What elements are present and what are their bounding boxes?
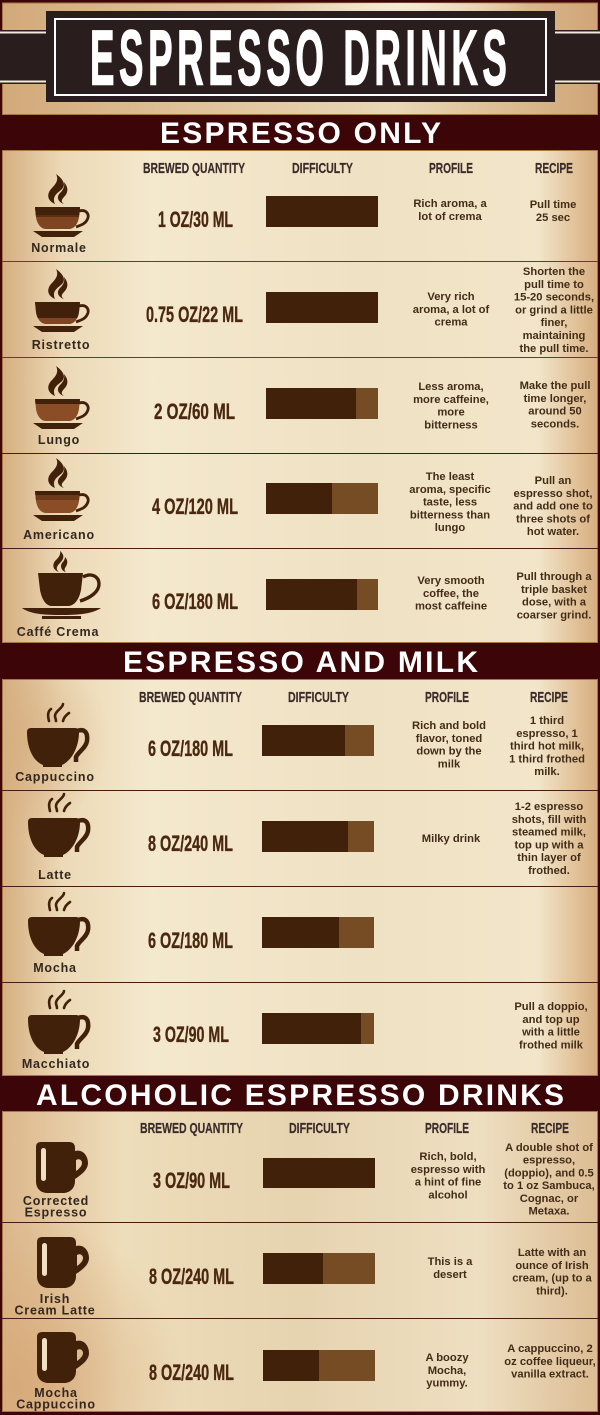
row: Ristretto: 0.75 OZ/22 ML — [146, 302, 243, 327]
row: Lungo: Make the pull — [520, 380, 590, 392]
row: Latte: Milky drink — [422, 833, 481, 845]
row: Ristretto: aroma, a lot of — [413, 304, 490, 316]
row: Corrected Espresso: Corrected — [23, 1194, 89, 1208]
section banner: espresso only — [0, 115, 600, 150]
row: Irish Cream Latte: Cream Latte — [14, 1304, 96, 1318]
row: Americano: aroma, specific — [409, 484, 491, 496]
row: Mocha Cappuccino: oz coffee liqueur, — [504, 1356, 596, 1368]
row: Latte: 8 OZ/240 ML — [148, 831, 233, 856]
column headers: DIFFICULTY — [292, 160, 353, 177]
column headers — [143, 160, 573, 177]
row: Ristretto: maintaining — [523, 330, 586, 342]
row: Macchiato: Pull a doppio, — [514, 1001, 588, 1013]
row: Mocha — [28, 893, 374, 975]
row: Ristretto — [32, 266, 594, 355]
icon: large cup and saucer — [22, 551, 101, 619]
row: Irish Cream Latte: Latte with an — [518, 1247, 586, 1259]
column headers: PROFILE — [425, 689, 469, 706]
row: Ristretto: crema — [435, 317, 468, 329]
row: Caffé Crema: dose, with a — [522, 597, 587, 609]
row: Macchiato: 3 OZ/90 ML — [153, 1022, 229, 1047]
row: Irish Cream Latte: cream, (up to a — [512, 1273, 593, 1285]
row: Caffé Crema: Pull through a — [516, 571, 592, 583]
difficulty bar — [266, 388, 378, 419]
difficulty bar — [262, 917, 374, 948]
panel: alcoholic espresso drinks — [2, 1112, 598, 1412]
row: Macchiato: with a little — [521, 1027, 580, 1039]
row: Mocha Cappuccino: Mocha, — [428, 1365, 466, 1377]
icon: layered cup — [33, 458, 88, 521]
row: Americano: 4 OZ/120 ML — [152, 494, 238, 519]
column headers: PROFILE — [429, 160, 473, 177]
panel: espresso only — [2, 150, 598, 642]
row: Mocha Cappuccino: Mocha — [34, 1386, 78, 1400]
section banner: espresso and milk: ESPRESSO AND MILK — [123, 646, 478, 679]
row: Americano: The least — [426, 471, 474, 483]
row: Normale: Pull time — [530, 199, 576, 211]
icon: mug — [37, 1237, 89, 1288]
row: Cappuccino: third hot milk, — [510, 741, 584, 753]
row: Corrected Espresso: Metaxa. — [528, 1206, 570, 1218]
row: Irish Cream Latte: ounce of Irish — [515, 1260, 589, 1272]
row: Latte: steamed milk, — [512, 827, 586, 839]
icon: steaming cup — [28, 893, 88, 956]
column headers — [140, 1120, 569, 1137]
row: Macchiato: and top up — [522, 1014, 580, 1026]
row: Mocha Cappuccino: A boozy — [425, 1352, 469, 1364]
icon: layered cup — [33, 269, 88, 332]
row: Lungo: more caffeine, — [413, 394, 489, 406]
row: Lungo — [33, 366, 590, 447]
row: Lungo: bitterness — [424, 419, 478, 431]
row: Ristretto: 15-20 seconds, — [514, 292, 594, 304]
row: Mocha Cappuccino — [16, 1332, 596, 1412]
row: Normale: Rich aroma, a — [413, 198, 487, 210]
icon: mug — [37, 1332, 89, 1383]
row: Americano: Pull an — [535, 475, 571, 487]
row: Normale: 1 OZ/30 ML — [158, 207, 233, 232]
row: Cappuccino: 6 OZ/180 ML — [148, 736, 233, 761]
row: Mocha Cappuccino: Cappuccino — [16, 1398, 96, 1412]
row: Cappuccino: espresso, 1 — [516, 728, 578, 740]
column headers: BREWED QUANTITY — [139, 689, 242, 706]
difficulty bar — [266, 292, 378, 323]
row: Latte: shots, fill with — [512, 814, 586, 826]
row: Macchiato: Macchiato — [22, 1057, 90, 1071]
icon: steaming cup — [28, 991, 88, 1054]
icon: layered cup — [33, 366, 88, 429]
row: Cappuccino: milk — [438, 758, 461, 770]
row: Lungo: seconds. — [531, 418, 579, 430]
row: Lungo: Less aroma, — [418, 381, 484, 393]
row: Mocha: Mocha — [33, 961, 77, 975]
row: Latte — [28, 794, 586, 882]
difficulty bar — [262, 821, 374, 852]
row: Americano: and add one to — [513, 501, 593, 513]
row: Caffé Crema: coarser grind. — [517, 609, 591, 621]
row: Caffé Crema: 6 OZ/180 ML — [152, 589, 238, 614]
row: Caffé Crema: Very smooth — [417, 575, 485, 587]
row: Latte: 1-2 espresso — [515, 801, 583, 813]
row: Corrected Espresso: (doppio), and 0.5 — [504, 1167, 594, 1179]
row: Cappuccino: 1 third — [530, 715, 564, 727]
difficulty bar — [266, 196, 378, 227]
row: Ristretto: finer, — [541, 317, 567, 329]
row: Lungo: time longer, — [524, 393, 586, 405]
row: Americano: espresso shot, — [514, 488, 592, 500]
section banner: espresso only: ESPRESSO ONLY — [160, 117, 441, 150]
column headers: BREWED QUANTITY — [143, 160, 245, 177]
title: ESPRESSO DRINKS — [90, 14, 511, 101]
row: Normale: 25 sec — [536, 212, 570, 224]
difficulty bar — [263, 1253, 375, 1284]
row: Corrected Espresso: Espresso — [25, 1206, 87, 1220]
row: Lungo: Lungo — [38, 433, 80, 447]
row: Latte: frothed. — [528, 865, 570, 877]
row: Irish Cream Latte: third). — [536, 1285, 568, 1297]
row: Normale: lot of crema — [418, 211, 482, 223]
row: Latte: thin layer of — [517, 852, 581, 864]
row: Ristretto: Very rich — [427, 291, 475, 303]
row: Latte: Latte — [38, 868, 72, 882]
row: Corrected Espresso: Cognac, or — [520, 1193, 579, 1205]
row: Corrected Espresso — [23, 1142, 595, 1220]
row: Ristretto: or grind a little — [515, 304, 593, 316]
row: Americano — [23, 458, 593, 542]
column headers: DIFFICULTY — [288, 689, 349, 706]
difficulty bar — [262, 725, 374, 756]
row: Ristretto: Shorten the — [523, 266, 585, 278]
icon: steaming cup — [28, 794, 88, 857]
row: Corrected Espresso: 3 OZ/90 ML — [153, 1168, 230, 1193]
row: Irish Cream Latte: This is a — [428, 1256, 472, 1268]
row: Caffé Crema — [17, 551, 592, 639]
row: Corrected Espresso: espresso with — [411, 1164, 485, 1176]
icon: mug — [36, 1142, 88, 1193]
difficulty bar — [266, 579, 378, 610]
row: Corrected Espresso: A double shot of — [505, 1142, 593, 1154]
title band — [0, 30, 600, 84]
row: Americano: Americano — [23, 528, 95, 542]
row: Mocha Cappuccino: 8 OZ/240 ML — [149, 1360, 234, 1385]
row: Mocha Cappuccino: yummy. — [426, 1378, 468, 1390]
difficulty bar — [263, 1350, 375, 1381]
section banner: espresso and milk — [0, 643, 600, 679]
header background — [2, 3, 598, 114]
row: Ristretto: pull time to — [524, 279, 584, 291]
row: Macchiato — [22, 991, 588, 1071]
row: Normale — [31, 174, 576, 255]
row: Corrected Espresso: espresso, — [523, 1155, 575, 1167]
difficulty bar — [262, 1013, 374, 1044]
row: Mocha Cappuccino: A cappuccino, 2 — [507, 1343, 593, 1355]
column headers: RECIPE — [535, 160, 573, 177]
column headers: RECIPE — [531, 1120, 569, 1137]
row: Cappuccino — [15, 704, 585, 784]
row: Caffé Crema: most caffeine — [415, 601, 487, 613]
row: Americano: taste, less — [423, 497, 477, 509]
row: Cappuccino: 1 third frothed — [509, 753, 585, 765]
panel: espresso and milk — [2, 680, 598, 1076]
row: Ristretto: the pull time. — [520, 343, 588, 355]
row: Corrected Espresso: a hint of fine — [415, 1177, 481, 1189]
title plate — [46, 11, 555, 102]
row: Lungo: more — [437, 407, 465, 419]
row: Ristretto: Ristretto — [32, 338, 90, 352]
row: Irish Cream Latte: Irish — [40, 1292, 70, 1306]
difficulty bar — [266, 483, 378, 514]
row: Corrected Espresso: Rich, bold, — [419, 1151, 477, 1163]
section banner: alcoholic espresso drinks: ALCOHOLIC ESPRESSO DRINKS — [36, 1079, 564, 1112]
row: Caffé Crema: Caffé Crema — [17, 625, 99, 639]
row: Irish Cream Latte: 8 OZ/240 ML — [149, 1264, 234, 1289]
column headers: BREWED QUANTITY — [140, 1120, 243, 1137]
row: Irish Cream Latte — [14, 1237, 593, 1318]
row: Corrected Espresso: to 1 oz Sambuca, — [503, 1180, 595, 1192]
row: Cappuccino: Rich and bold — [412, 720, 486, 732]
row: Macchiato: frothed milk — [519, 1039, 584, 1051]
row: Mocha Cappuccino: vanilla extract. — [511, 1369, 589, 1381]
row: Normale: Normale — [31, 241, 87, 255]
icon: steaming cup — [27, 704, 87, 767]
row: Latte: top up with a — [515, 839, 584, 851]
column headers: PROFILE — [425, 1120, 469, 1137]
column headers: DIFFICULTY — [289, 1120, 350, 1137]
row: Mocha: 6 OZ/180 ML — [148, 928, 233, 953]
column headers — [139, 689, 568, 706]
row: Lungo: around 50 — [528, 406, 582, 418]
row: Americano: hot water. — [527, 526, 579, 538]
row: Americano: lungo — [435, 522, 465, 534]
row: Cappuccino: Cappuccino — [15, 770, 95, 784]
row: Caffé Crema: triple basket — [521, 584, 587, 596]
row: Cappuccino: down by the — [416, 746, 482, 758]
icon: layered cup — [33, 174, 88, 237]
row: Corrected Espresso: alcohol — [428, 1189, 468, 1201]
difficulty bar — [263, 1158, 375, 1188]
row: Cappuccino: milk. — [534, 766, 560, 778]
row: Americano: three shots of — [516, 513, 590, 525]
row: Caffé Crema: coffee, the — [423, 588, 479, 600]
column headers: RECIPE — [530, 689, 568, 706]
row: Americano: bitterness than — [410, 509, 490, 521]
row: Lungo: 2 OZ/60 ML — [154, 399, 235, 424]
row: Irish Cream Latte: desert — [433, 1269, 467, 1281]
row: Cappuccino: flavor, toned — [416, 733, 482, 745]
